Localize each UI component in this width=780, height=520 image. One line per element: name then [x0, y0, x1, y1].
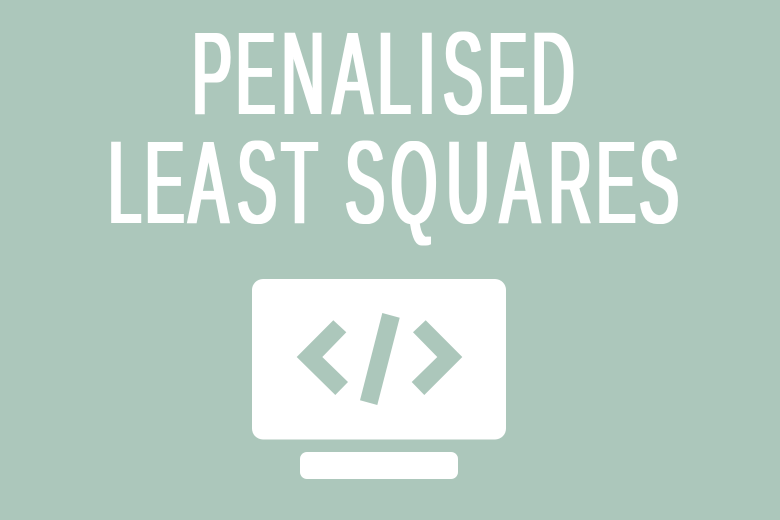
- monitor base: [300, 452, 458, 479]
- icon: right chevron: [412, 320, 462, 395]
- icon: left chevron: [297, 320, 348, 395]
- monitor screen: [252, 279, 506, 440]
- icon: slash: [360, 313, 400, 405]
- icon: computer monitor with code symbol: [252, 279, 506, 479]
- title: [108, 8, 679, 248]
- title line 2: LEAST SQUARES: [108, 117, 679, 248]
- title line 1: PENALISED: [192, 8, 574, 139]
